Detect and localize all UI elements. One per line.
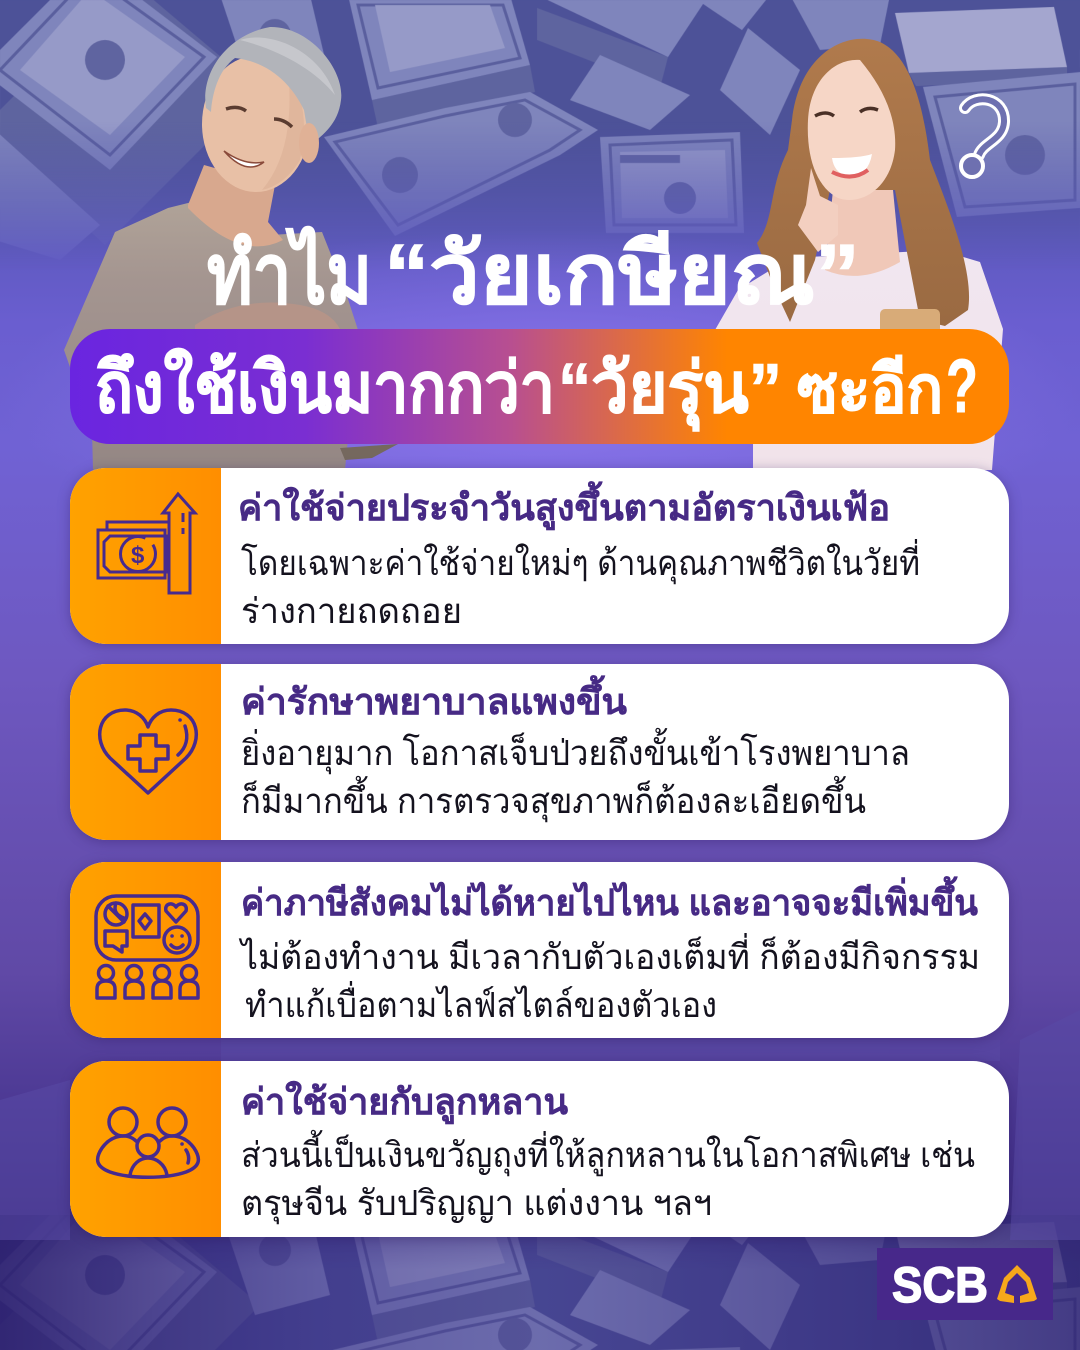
photo: older woman bbox=[64, 27, 398, 470]
panel: social costs bbox=[70, 862, 1009, 1038]
body text: ส่วนนี้เป็นเงินขวัญถุงที่ให้ลูกหลานในโอกาสพิเศษ เช่น bbox=[241, 1129, 975, 1176]
heading: ค่าใช้จ่ายกับลูกหลาน bbox=[241, 1080, 568, 1125]
faint bills beside the lower cards bbox=[0, 1010, 1080, 1240]
body text bbox=[241, 727, 910, 822]
money background top bbox=[0, 0, 1080, 240]
glow behind title bbox=[0, 230, 1080, 570]
title: ทำไม bbox=[207, 226, 372, 321]
question mark icon bbox=[961, 99, 1004, 177]
banner text: ถึงใช้เงินมากกว่า bbox=[95, 347, 555, 427]
panel: daily expenses bbox=[70, 468, 1009, 644]
body text bbox=[241, 1129, 975, 1224]
title bbox=[207, 226, 860, 321]
body text bbox=[238, 933, 980, 1025]
money background bottom bbox=[0, 1215, 1080, 1350]
body text: ไม่ต้องทำงาน มีเวลากับตัวเองเต็มที่ ก็ต้องมีกิจกรรม bbox=[238, 933, 980, 977]
panel: medical costs bbox=[70, 664, 1009, 840]
heading: ค่าภาษีสังคมไม่ได้หายไปไหน และอาจจะมีเพิ่มขึ้น bbox=[241, 876, 978, 923]
photo: young woman bbox=[715, 39, 1003, 470]
body text: ยิ่งอายุมาก โอกาสเจ็บป่วยถึงขั้นเข้าโรงพยาบาล bbox=[241, 727, 910, 774]
icon: SCB leaf bbox=[997, 1265, 1037, 1303]
body text: ตรุษจีน รับปริญญา แต่งงาน ฯลฯ bbox=[241, 1184, 712, 1224]
icon: activities and people bbox=[96, 896, 198, 998]
body text: โดยเฉพาะค่าใช้จ่ายใหม่ๆ ด้านคุณภาพชีวิตในวัยที่ bbox=[241, 539, 920, 584]
icon: money with arrow: $ bbox=[131, 542, 145, 569]
heading: ค่ารักษาพยาบาลแพงขึ้น bbox=[241, 675, 627, 722]
banner text bbox=[95, 344, 978, 432]
logo: SCB bbox=[877, 1248, 1053, 1320]
banner bbox=[70, 329, 1009, 444]
panel: grandchildren costs bbox=[70, 1061, 1009, 1237]
icon: family bbox=[98, 1108, 198, 1177]
body text: ร่างกายถดถอย bbox=[241, 592, 462, 631]
icon: money with arrow bbox=[98, 494, 195, 593]
heading: ค่าใช้จ่ายประจำวันสูงขึ้นตามอัตราเงินเฟ้อ bbox=[238, 481, 890, 531]
banner text: ซะอีก bbox=[797, 352, 943, 426]
title: “วัยเกษียณ” bbox=[384, 227, 860, 321]
banner text: “วัยรุ่น” bbox=[558, 349, 782, 432]
body text bbox=[241, 539, 920, 631]
logo: SCB: SCB bbox=[892, 1257, 988, 1313]
body text: ทำแก้เบื่อตามไลฟ์สไตล์ของตัวเอง bbox=[245, 981, 717, 1025]
body text: ก็มีมากขึ้น การตรวจสุขภาพก็ต้องละเอียดขึ้น bbox=[241, 775, 866, 822]
banner text: ? bbox=[946, 344, 978, 429]
icon: heart with cross bbox=[100, 710, 196, 793]
